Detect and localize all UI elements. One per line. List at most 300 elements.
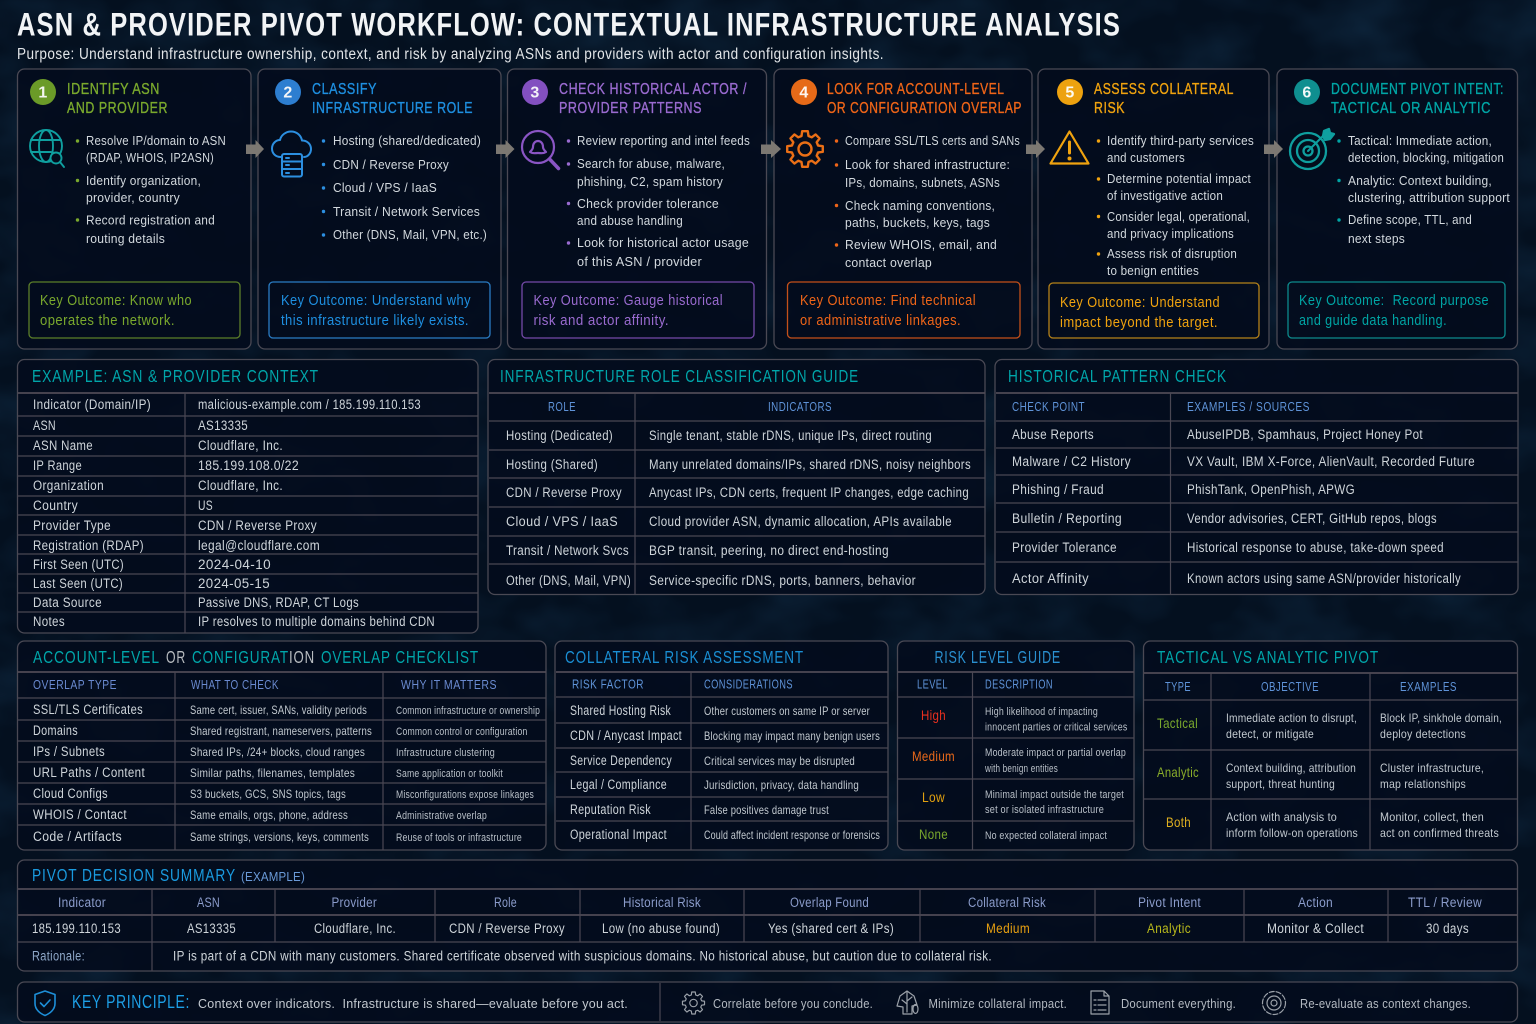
step 2 heading: CLASSIFY	[312, 81, 377, 98]
panel: key principle footer	[18, 982, 1518, 1022]
step 3 key outcome: Key Outcome: Gauge historical	[534, 293, 723, 309]
role guide rows: Hosting (Shared)	[506, 457, 598, 472]
role guide column headers: INDICATORS	[768, 400, 832, 414]
step 5 number badge	[1057, 79, 1083, 105]
step 2 bullets: Cloud / VPS / IaaS	[333, 180, 437, 195]
summary column headers: Pivot Intent	[1138, 895, 1201, 910]
context table rows: AS13335	[198, 418, 248, 433]
overlap checklist rows: Common infrastructure or ownership	[396, 705, 540, 717]
tip: minimize: Minimize collateral impact.	[928, 997, 1067, 1011]
heading: overlap checklist	[33, 647, 479, 667]
step 2 number badge	[275, 79, 301, 105]
role guide rows: BGP transit, peering, no direct end-hosting	[649, 543, 889, 558]
tactical vs analytic column headers	[1165, 680, 1457, 694]
risk level: none	[919, 826, 1107, 842]
step 6 bullets: Define scope, TTL, and	[1348, 212, 1472, 227]
step 4 bullets	[835, 133, 1020, 270]
overlap checklist rows: Code / Artifacts	[33, 829, 122, 844]
step 4 bullets: paths, buckets, keys, tags	[845, 215, 990, 230]
key principle statement: KEY PRINCIPLE:	[72, 992, 190, 1012]
step 6 bullets: Analytic: Context building,	[1348, 173, 1492, 188]
role guide rows: Hosting (Dedicated)	[506, 428, 613, 443]
panel: step 3 historical patterns	[508, 69, 766, 349]
collateral risk column headers: RISK FACTOR	[572, 678, 644, 692]
row: tactical: deploy detections	[1380, 727, 1466, 741]
context table rows: IP resolves to multiple domains behind CDN	[198, 614, 435, 629]
step 4 key outcome: or administrative linkages.	[800, 313, 961, 329]
step 2 key outcome	[269, 282, 490, 338]
step 5 bullets	[1097, 133, 1254, 278]
overlap checklist rows: Similar paths, filenames, templates	[190, 766, 355, 780]
step 6 key outcome: Key Outcome: Record purpose	[1299, 293, 1489, 309]
step 2 heading	[312, 81, 473, 117]
step 6 number badge: 6	[1302, 84, 1312, 102]
arrow: step 5 to 6	[1264, 140, 1283, 158]
row: both: Monitor, collect, then	[1380, 810, 1484, 824]
step 1 bullets: (RDAP, WHOIS, IP2ASN)	[86, 150, 214, 165]
overlap checklist rows: Administrative overlap	[396, 810, 487, 822]
step 1 number badge	[30, 79, 56, 105]
historical check rows	[1012, 427, 1475, 586]
risk level: low: Minimal impact outside the target	[985, 789, 1124, 801]
step 3 bullets: phishing, C2, spam history	[577, 174, 723, 189]
key principle statement: Context over indicators. Infrastructure is shared—evaluate before you act.	[198, 996, 628, 1011]
step 6 heading: TACTICAL OR ANALYTIC	[1331, 100, 1491, 117]
context table rows: IP Range	[33, 458, 82, 473]
step 2 number badge: 2	[283, 84, 293, 102]
overlap checklist column headers: WHAT TO CHECK	[191, 678, 279, 692]
context table rows: First Seen (UTC)	[33, 557, 124, 572]
step 1 key outcome	[29, 282, 240, 338]
summary column headers: Overlap Found	[790, 895, 869, 910]
panel: risk level guide	[898, 641, 1134, 850]
step 2 bullets: Transit / Network Services	[333, 204, 480, 219]
role guide rows: Anycast IPs, CDN certs, frequent IP changes, edge caching	[649, 485, 969, 500]
summary data row: Cloudflare, Inc.	[314, 921, 396, 936]
panel: step 6 document pivot intent	[1277, 69, 1518, 349]
row: both: act on confirmed threats	[1380, 826, 1499, 840]
collateral risk rows: Legal / Compliance	[570, 777, 667, 792]
historical check column headers: EXAMPLES / SOURCES	[1187, 400, 1310, 414]
context table rows: Data Source	[33, 595, 102, 610]
summary data row: 30 days	[1426, 921, 1469, 936]
step 5 key outcome: Key Outcome: Understand	[1060, 295, 1220, 311]
step 6 heading	[1331, 81, 1504, 117]
risk level: high	[921, 706, 1128, 734]
risk level: high: High likelihood of impacting	[985, 706, 1098, 718]
context table rows: legal@cloudflare.com	[198, 538, 320, 553]
step 5 bullets: Assess risk of disruption	[1107, 246, 1237, 261]
step 5 bullets: and privacy implications	[1107, 226, 1234, 241]
icon: target with arrow	[1290, 129, 1334, 169]
risk level column headers: LEVEL	[917, 678, 948, 692]
step 4 bullets: Compare SSL/TLS certs and SANs	[845, 133, 1020, 148]
step 6 bullets: clustering, attribution support	[1348, 190, 1510, 205]
collateral risk column headers: CONSIDERATIONS	[704, 678, 793, 692]
step 4 heading: LOOK FOR ACCOUNT-LEVEL	[827, 81, 1004, 98]
risk level: none: No expected collateral impact	[985, 830, 1107, 842]
risk level: medium: Medium	[912, 748, 955, 764]
step 4 number badge: 4	[799, 84, 809, 102]
row: tactical	[1157, 711, 1502, 741]
heading: overlap checklist: ION	[289, 647, 315, 667]
role guide rows: Transit / Network Svcs	[506, 543, 629, 558]
tip: re-evaluate: Re-evaluate as context changes.	[1300, 997, 1471, 1011]
step 1 key outcome: operates the network.	[40, 313, 175, 329]
context table rows: Notes	[33, 614, 65, 629]
step 5 bullets: Identify third-party services	[1107, 133, 1254, 148]
tip: correlate: Correlate before you conclude.	[713, 997, 873, 1011]
step 2 key outcome: Key Outcome: Understand why	[281, 293, 471, 309]
context table rows: Country	[33, 498, 78, 513]
tactical vs analytic column headers: OBJECTIVE	[1261, 680, 1319, 694]
risk level: none: None	[919, 826, 948, 842]
overlap checklist rows: Infrastructure clustering	[396, 747, 495, 759]
overlap checklist rows: Same emails, orgs, phone, address	[190, 808, 348, 822]
role guide column headers	[548, 400, 832, 414]
step 3 key outcome: risk and actor affinity.	[534, 313, 669, 329]
role guide rows: Many unrelated domains/IPs, shared rDNS, noisy neighbors	[649, 457, 971, 472]
overlap checklist rows: SSL/TLS Certificates	[33, 702, 143, 717]
summary column headers: Provider	[332, 895, 377, 910]
panel: example ASN and provider context	[18, 360, 478, 633]
step 4 bullets: contact overlap	[845, 255, 932, 270]
step 3 bullets	[567, 133, 750, 269]
summary data row: 185.199.110.153	[32, 921, 121, 936]
collateral risk rows: Could affect incident response or forensics	[704, 828, 880, 842]
risk level column headers	[917, 678, 1053, 692]
collateral risk rows: CDN / Anycast Impact	[570, 728, 682, 743]
step 5 bullets: and customers	[1107, 150, 1185, 165]
role guide column headers: ROLE	[548, 400, 576, 414]
panel: pivot decision summary	[18, 860, 1518, 971]
context table rows	[33, 397, 435, 629]
step 5 heading	[1094, 81, 1234, 117]
step 1 bullets: Identify organization,	[86, 173, 201, 188]
heading: overlap checklist: CONFIGURAT	[192, 647, 289, 667]
heading: example context: EXAMPLE: ASN & PROVIDER CONTEXT	[32, 366, 319, 386]
summary column headers	[58, 895, 1482, 910]
step 1 bullets: routing details	[86, 231, 165, 246]
step 5 bullets: to benign entities	[1107, 263, 1199, 278]
icon: document	[1091, 991, 1109, 1014]
summary column headers: Role	[494, 895, 517, 910]
row: both: inform follow-on operations	[1226, 826, 1358, 840]
overlap checklist column headers: WHY IT MATTERS	[401, 678, 497, 692]
step 2 key outcome: this infrastructure likely exists.	[281, 313, 469, 329]
overlap checklist rows: Domains	[33, 723, 78, 738]
overlap checklist rows: WHOIS / Contact	[33, 807, 127, 822]
tactical vs analytic column headers: TYPE	[1165, 680, 1191, 694]
tip: document: Document everything.	[1121, 997, 1236, 1011]
context table rows: US	[198, 498, 213, 513]
collateral risk rows: Service Dependency	[570, 753, 672, 768]
role guide rows: Other (DNS, Mail, VPN)	[506, 573, 631, 588]
step 5 heading: RISK	[1094, 100, 1125, 117]
role guide rows	[506, 428, 971, 588]
overlap checklist column headers	[33, 678, 497, 692]
title: ASN & PROVIDER PIVOT WORKFLOW: CONTEXTUAL INFRASTRUCTURE ANALYSIS	[17, 6, 1121, 42]
row: tactical: Tactical	[1157, 715, 1198, 731]
overlap checklist rows: Shared registrant, nameservers, patterns	[190, 724, 372, 738]
step 5 number badge: 5	[1065, 84, 1075, 102]
row: analytic: support, threat hunting	[1226, 777, 1335, 791]
historical check rows: Actor Affinity	[1012, 571, 1089, 586]
step 1 bullets	[76, 133, 226, 246]
step 6 bullets	[1337, 133, 1510, 246]
summary data row: AS13335	[187, 921, 236, 936]
overlap checklist rows: URL Paths / Content	[33, 765, 145, 780]
step 4 heading	[827, 81, 1022, 117]
context table rows: 185.199.108.0/22	[198, 458, 299, 473]
context table rows: Organization	[33, 478, 104, 493]
collateral risk rows: Critical services may be disrupted	[704, 754, 855, 768]
heading: overlap checklist: ACCOUNT-LEVEL	[33, 647, 160, 667]
historical check rows: Provider Tolerance	[1012, 540, 1117, 555]
summary data row: Low (no abuse found)	[602, 921, 720, 936]
panel: collateral risk assessment	[555, 641, 888, 850]
risk level: low	[922, 789, 1124, 816]
panel: step 2 classify infrastructure role	[258, 69, 501, 349]
risk level: medium	[912, 747, 1126, 775]
icon: warning triangle	[1050, 132, 1088, 164]
step 4 bullets: Look for shared infrastructure:	[845, 157, 1010, 172]
step 5 bullets: Determine potential impact	[1107, 171, 1251, 186]
context table rows: Last Seen (UTC)	[33, 576, 123, 591]
heading: overlap checklist: OR	[166, 647, 186, 667]
step 3 bullets: Check provider tolerance	[577, 196, 719, 211]
step 3 bullets: and abuse handling	[577, 213, 683, 228]
step 2 bullets	[322, 133, 487, 242]
step 2 heading: INFRASTRUCTURE ROLE	[312, 100, 473, 117]
historical check rows: AbuseIPDB, Spamhaus, Project Honey Pot	[1187, 427, 1423, 442]
overlap checklist rows: Same strings, versions, keys, comments	[190, 830, 369, 844]
overlap checklist rows: Shared IPs, /24+ blocks, cloud ranges	[190, 745, 365, 759]
panel: infrastructure role classification guide	[488, 360, 985, 594]
step 3 heading: PROVIDER PATTERNS	[559, 100, 702, 117]
context table rows: ASN Name	[33, 438, 93, 453]
icon: gear	[787, 131, 823, 167]
collateral risk rows: Other customers on same IP or server	[704, 704, 870, 718]
heading: collateral risk assessment: COLLATERAL RISK ASSESSMENT	[565, 647, 804, 667]
collateral risk rows: Jurisdiction, privacy, data handling	[704, 778, 859, 792]
step 4 key outcome: Key Outcome: Find technical	[800, 293, 976, 309]
overlap checklist rows: S3 buckets, GCS, SNS topics, tags	[190, 787, 346, 801]
context table rows: Registration (RDAP)	[33, 538, 144, 553]
tactical vs analytic column headers: EXAMPLES	[1400, 680, 1457, 694]
icon: magnifier with actor	[522, 131, 558, 168]
step 3 bullets: Search for abuse, malware,	[577, 156, 725, 171]
collateral risk rows: Reputation Risk	[570, 802, 651, 817]
risk level: low: Low	[922, 789, 945, 805]
context table rows: Cloudflare, Inc.	[198, 478, 283, 493]
icon: minimize impact	[897, 991, 918, 1014]
step 4 number badge	[791, 79, 817, 105]
collateral risk rows: False positives damage trust	[704, 803, 829, 817]
summary data row: Yes (shared cert & IPs)	[768, 921, 894, 936]
risk level: medium: with benign entities	[984, 763, 1058, 775]
subtitle: purpose: Purpose: Understand infrastructure ownership, context, and risk by analyzing ASNs and providers with actor and configuration insights.	[17, 46, 884, 63]
row: tactical: detect, or mitigate	[1226, 727, 1314, 741]
panel: historical pattern check	[995, 360, 1518, 594]
row: both	[1166, 810, 1499, 840]
step 3 heading	[559, 81, 747, 117]
summary data row: CDN / Reverse Proxy	[449, 921, 565, 936]
context table rows: Cloudflare, Inc.	[198, 438, 283, 453]
step 5 key outcome: impact beyond the target.	[1060, 315, 1218, 331]
overlap checklist rows: Reuse of tools or infrastructure	[396, 832, 522, 844]
panel: account-level or configuration overlap checklist	[18, 641, 546, 850]
row: analytic: map relationships	[1380, 777, 1466, 791]
collateral risk rows: Operational Impact	[570, 827, 667, 842]
heading: pivot decision summary: (EXAMPLE)	[241, 869, 305, 884]
step 1 bullets: Resolve IP/domain to ASN	[86, 133, 226, 148]
icon: globe with magnifier	[30, 130, 64, 167]
step 2 bullets: CDN / Reverse Proxy	[333, 157, 449, 172]
historical check rows: PhishTank, OpenPhish, APWG	[1187, 482, 1355, 497]
historical check rows: Phishing / Fraud	[1012, 482, 1104, 497]
step 1 key outcome: Key Outcome: Know who	[40, 293, 192, 309]
role guide rows: CDN / Reverse Proxy	[506, 485, 622, 500]
step 3 key outcome	[522, 282, 754, 338]
step 3 number badge: 3	[530, 84, 540, 102]
role guide rows: Service-specific rDNS, ports, banners, behavior	[649, 573, 916, 588]
risk level: medium: Moderate impact or partial overlap	[985, 747, 1126, 759]
arrow: step 1 to 2	[246, 140, 264, 158]
arrow: step 3 to 4	[761, 140, 781, 158]
heading: tactical vs analytic: TACTICAL VS ANALYTIC PIVOT	[1157, 647, 1379, 667]
collateral risk rows: Shared Hosting Risk	[570, 703, 671, 718]
arrow: step 4 to 5	[1026, 140, 1045, 158]
step 5 bullets: Consider legal, operational,	[1107, 209, 1250, 224]
overlap checklist column headers: OVERLAP TYPE	[33, 678, 117, 692]
heading: historical pattern check: HISTORICAL PATTERN CHECK	[1008, 366, 1227, 386]
collateral risk rows	[570, 703, 880, 842]
panel: step 1 identify ASN and provider	[18, 69, 251, 349]
row: tactical: Immediate action to disrupt,	[1226, 711, 1357, 725]
rationale row: Rationale:	[32, 948, 85, 964]
step 1 heading: AND PROVIDER	[67, 100, 168, 117]
icon: correlate gear	[682, 992, 705, 1014]
arrow: step 2 to 3	[496, 140, 514, 158]
summary column headers: TTL / Review	[1408, 895, 1482, 910]
historical check rows: Vendor advisories, CERT, GitHub repos, blogs	[1187, 511, 1437, 526]
step 2 bullets: Hosting (shared/dedicated)	[333, 133, 481, 148]
summary column headers: Collateral Risk	[968, 895, 1046, 910]
step 3 number badge	[522, 79, 548, 105]
key principle statement	[72, 992, 628, 1012]
step 1 heading: IDENTIFY ASN	[67, 81, 160, 98]
context table rows: ASN	[33, 418, 56, 433]
summary data row: Medium	[986, 921, 1030, 936]
row: analytic	[1157, 761, 1484, 791]
step 6 number badge	[1294, 79, 1320, 105]
heading: risk level guide: RISK LEVEL GUIDE	[934, 647, 1061, 667]
row: both: Action with analysis to	[1226, 810, 1337, 824]
overlap checklist rows: Same application or toolkit	[396, 768, 503, 780]
step 1 heading	[67, 81, 168, 117]
panel: step 5 assess collateral risk	[1038, 69, 1269, 349]
summary data row: Monitor & Collect	[1267, 921, 1364, 936]
context table rows: malicious-example.com / 185.199.110.153	[198, 397, 421, 412]
step 6 bullets: next steps	[1348, 231, 1405, 246]
step 6 key outcome: and guide data handling.	[1299, 313, 1447, 329]
step 6 bullets: Tactical: Immediate action,	[1348, 133, 1492, 148]
summary column headers: ASN	[197, 895, 220, 910]
step 3 bullets: of this ASN / provider	[577, 254, 702, 269]
rationale row: IP is part of a CDN with many customers. Shared certificate observed with suspicious domains. No historical abuse, but caution due to collateral risk.	[173, 948, 992, 964]
step 5 bullets: of investigative action	[1107, 188, 1223, 203]
step 4 bullets: Check naming conventions,	[845, 198, 995, 213]
role guide rows: Cloud provider ASN, dynamic allocation, APIs available	[649, 514, 952, 529]
step 3 heading: CHECK HISTORICAL ACTOR /	[559, 81, 747, 98]
context table rows: Indicator (Domain/IP)	[33, 397, 151, 412]
step 3 bullets: Look for historical actor usage	[577, 235, 749, 250]
historical check rows: Bulletin / Reporting	[1012, 511, 1122, 526]
risk level: high: High	[921, 707, 946, 723]
step 6 key outcome	[1288, 282, 1505, 338]
summary column headers: Action	[1298, 895, 1333, 910]
context table rows: 2024-05-15	[198, 576, 270, 591]
step 3 bullets: Review reporting and intel feeds	[577, 133, 750, 148]
step 6 bullets: detection, blocking, mitigation	[1348, 150, 1504, 165]
row: tactical: Block IP, sinkhole domain,	[1380, 711, 1502, 725]
context table rows: CDN / Reverse Proxy	[198, 518, 317, 533]
step 2 bullets: Other (DNS, Mail, VPN, etc.)	[333, 227, 487, 242]
context table rows: Passive DNS, RDAP, CT Logs	[198, 595, 359, 610]
summary column headers: Historical Risk	[623, 895, 701, 910]
step 4 heading: OR CONFIGURATION OVERLAP	[827, 100, 1022, 117]
summary data row	[32, 921, 1469, 936]
overlap checklist rows: Cloud Configs	[33, 786, 108, 801]
heading: role guide: INFRASTRUCTURE ROLE CLASSIFICATION GUIDE	[500, 366, 859, 386]
historical check column headers	[1012, 400, 1310, 414]
overlap checklist rows: Misconfigurations expose linkages	[396, 789, 534, 801]
historical check rows: Known actors using same ASN/provider historically	[1187, 571, 1461, 586]
panel: tactical vs analytic pivot	[1144, 641, 1518, 850]
overlap checklist rows	[33, 702, 540, 844]
icon: re-evaluate	[1262, 992, 1286, 1014]
collateral risk rows: Blocking may impact many benign users	[704, 729, 880, 743]
summary data row: Analytic	[1147, 921, 1191, 936]
step 5 heading: ASSESS COLLATERAL	[1094, 81, 1234, 98]
icon: shield	[35, 991, 55, 1016]
historical check rows: Historical response to abuse, take-down speed	[1187, 540, 1444, 555]
historical check rows: Malware / C2 History	[1012, 454, 1131, 469]
risk level: high: innocent parties or critical services	[985, 722, 1128, 734]
overlap checklist rows: Same cert, issuer, SANs, validity periods	[190, 703, 367, 717]
overlap checklist rows: Common control or configuration	[396, 726, 528, 738]
panel: step 4 account-level overlap	[774, 69, 1032, 349]
risk level column headers: DESCRIPTION	[985, 678, 1053, 692]
overlap checklist rows: IPs / Subnets	[33, 744, 105, 759]
context table rows: 2024-04-10	[198, 557, 271, 572]
row: both: Both	[1166, 814, 1191, 830]
step 5 key outcome	[1049, 283, 1259, 338]
step 1 bullets: Record registration and	[86, 212, 215, 228]
role guide rows: Cloud / VPS / IaaS	[506, 514, 618, 529]
heading: overlap checklist: OVERLAP CHECKLIST	[321, 647, 479, 667]
row: analytic: Context building, attribution	[1226, 761, 1356, 775]
step 1 bullets: provider, country	[86, 190, 180, 205]
context table rows: Provider Type	[33, 518, 111, 533]
step 4 key outcome	[788, 282, 1020, 338]
role guide rows: Single tenant, stable rDNS, unique IPs, direct routing	[649, 428, 932, 443]
risk level: low: set or isolated infrastructure	[985, 804, 1104, 816]
row: analytic: Cluster infrastructure,	[1380, 761, 1484, 775]
collateral risk column headers	[572, 678, 793, 692]
step 1 number badge: 1	[38, 84, 48, 102]
